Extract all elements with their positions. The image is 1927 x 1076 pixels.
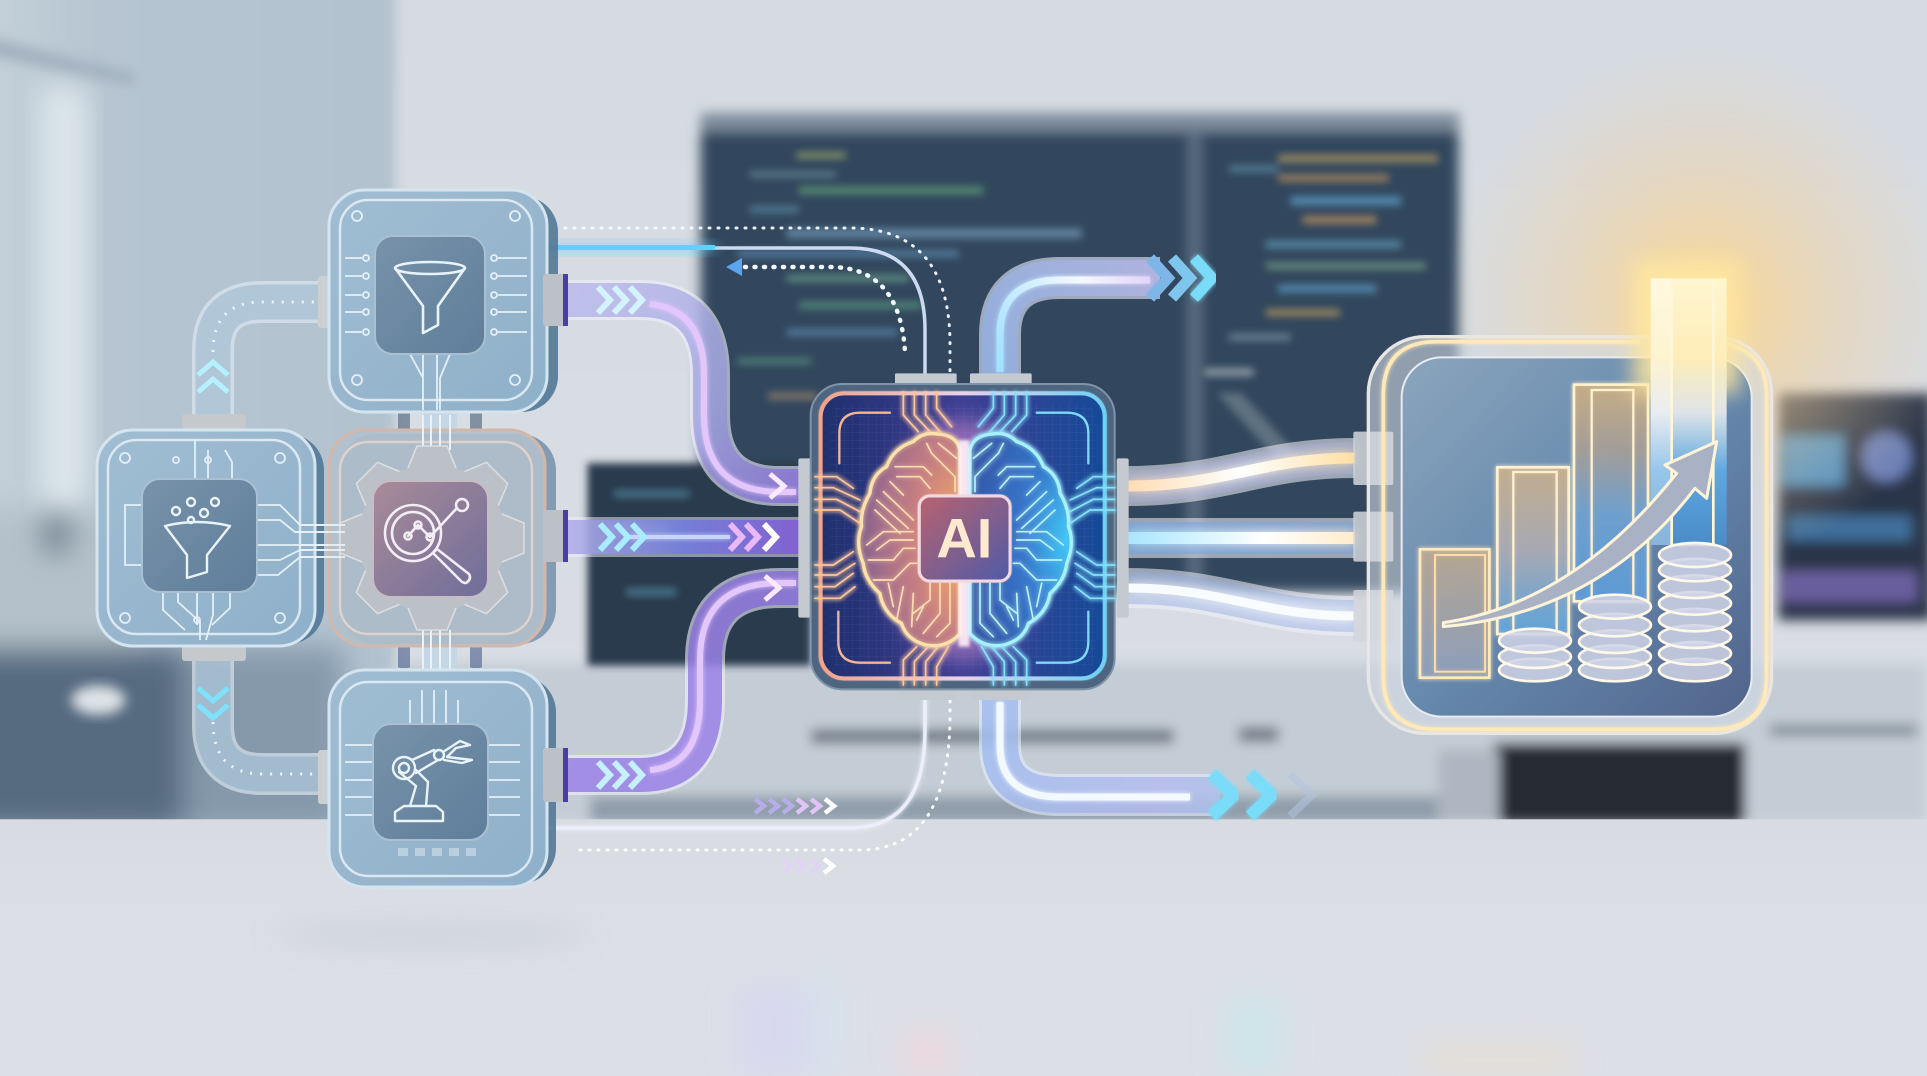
circuit traces: funnel module xyxy=(345,211,527,410)
pipe: robot module to AI xyxy=(565,576,800,788)
faint grid xyxy=(830,403,1097,670)
arrow head: dotted return xyxy=(726,258,742,276)
circuit traces: robot module xyxy=(345,690,520,815)
connector traces to gear xyxy=(423,415,450,670)
centre glow xyxy=(880,420,1047,660)
code lines xyxy=(737,152,1438,461)
thin upper return lines xyxy=(545,228,950,378)
growth arrow xyxy=(1443,442,1717,627)
warm glow xyxy=(1444,49,1927,565)
module: analysis gear xyxy=(295,415,568,670)
bar 3 xyxy=(1574,385,1648,601)
connectors xyxy=(1353,432,1393,642)
pipe: AI output upper xyxy=(1000,258,1212,375)
brain left hemisphere xyxy=(815,392,960,685)
panel interior xyxy=(1402,357,1752,717)
bar 4 xyxy=(1651,278,1727,545)
icon chip: data funnel xyxy=(142,479,257,592)
bar 2 xyxy=(1497,467,1569,634)
coin stack 2 xyxy=(1579,595,1651,681)
icon chip: analysis xyxy=(373,481,488,597)
gear xyxy=(340,446,524,630)
module: robot arm xyxy=(329,670,568,887)
icon: magnifier with graph xyxy=(385,499,470,583)
trace fan into gear xyxy=(295,525,345,557)
panel glow rim xyxy=(1383,342,1767,729)
left pipes between modules xyxy=(182,276,330,804)
brain right hemisphere xyxy=(970,392,1115,685)
pads: robot chip xyxy=(398,848,476,856)
icon chip: robot xyxy=(373,724,488,840)
large code monitor xyxy=(701,113,1459,592)
icon chip: funnel xyxy=(375,236,485,354)
chevrons: lower thin lines xyxy=(755,799,834,873)
left room shadows xyxy=(0,509,344,832)
circuit traces: data funnel xyxy=(120,440,345,640)
right monitor xyxy=(1778,393,1927,620)
pipes: AI to results xyxy=(1128,458,1355,616)
pipe: analysis module to AI xyxy=(565,524,800,550)
corner brackets xyxy=(838,413,1088,663)
module: data funnel xyxy=(97,430,345,646)
ceiling streak xyxy=(0,37,135,86)
module stems xyxy=(398,410,482,674)
connectors xyxy=(798,373,1129,700)
icon: funnel with particles xyxy=(165,498,230,578)
pipe: AI output lower xyxy=(1000,700,1312,816)
left monitor xyxy=(587,463,811,666)
window light xyxy=(39,86,88,528)
chip body xyxy=(811,384,1115,689)
AI label: AI xyxy=(936,506,992,569)
bar 4 glow xyxy=(1633,260,1740,393)
bar 1 xyxy=(1420,549,1489,678)
chip face xyxy=(821,393,1105,678)
panel: growth results xyxy=(1353,260,1772,733)
coin stack 3 xyxy=(1659,543,1731,681)
pipe: top module to AI xyxy=(565,287,800,498)
coin stack 1 xyxy=(1499,629,1571,681)
icon: robot arm xyxy=(393,741,472,821)
thin lower return lines xyxy=(550,700,950,850)
AI chip xyxy=(919,496,1010,581)
table xyxy=(0,819,1927,1076)
office lamp blur xyxy=(71,685,125,715)
icon: funnel xyxy=(395,262,465,333)
module: filter funnel xyxy=(329,190,568,412)
table reflections xyxy=(270,930,1573,1076)
desks xyxy=(396,663,1927,823)
centre seam xyxy=(958,440,970,647)
module: AI brain processor xyxy=(798,373,1129,700)
panel frame xyxy=(1368,337,1772,733)
